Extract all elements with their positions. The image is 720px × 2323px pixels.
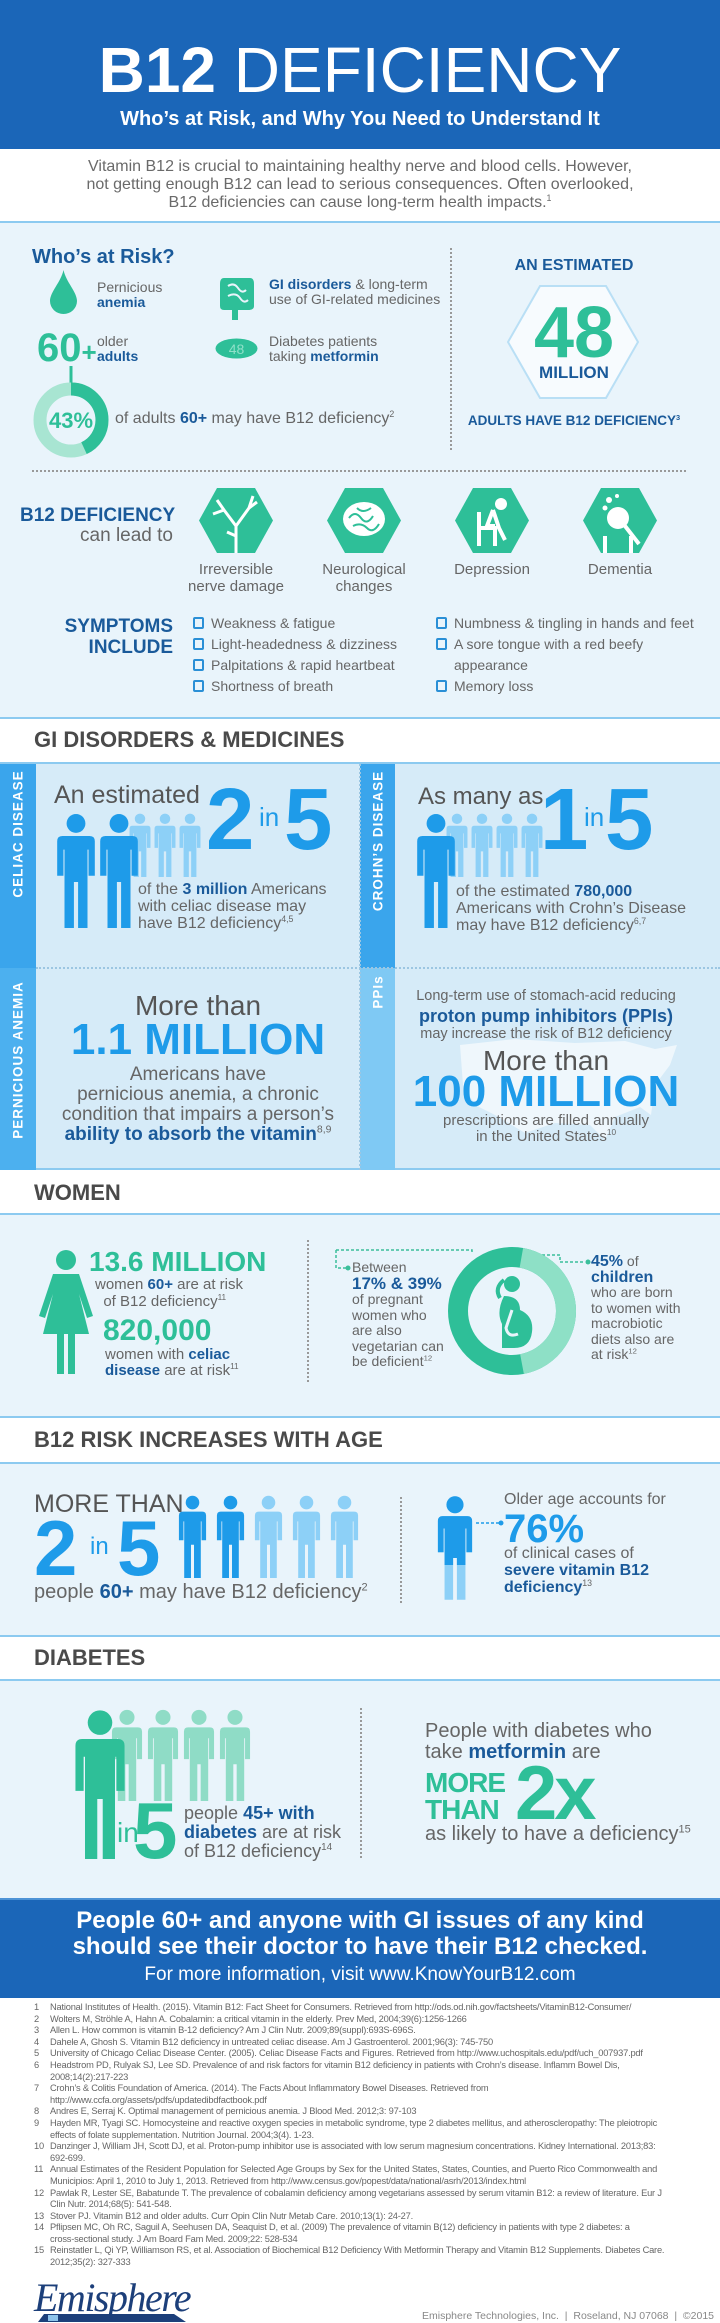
text: 76% stat: severe vitamin B12 — [504, 1562, 649, 1579]
text: older adults: older — [97, 333, 128, 349]
text: metformin stat — [425, 1720, 691, 1845]
panel: GI disorders grid — [0, 762, 720, 1170]
references: 11 — [34, 2164, 43, 2174]
text: older adults — [97, 333, 138, 364]
text: 76% stat: deficiency13 — [504, 1578, 592, 1596]
stat: 2 in 5 people 60+: 2 — [34, 1504, 77, 1592]
list: symptoms column 2 — [436, 615, 694, 694]
text: pregnant women stat: be deficient12 — [352, 1353, 432, 1369]
references: 7 — [34, 2083, 39, 2093]
panel: crohn's: 5 — [605, 771, 653, 868]
text: symptoms include — [65, 616, 173, 658]
chart: 43% ring: 43% — [49, 408, 93, 433]
label: celiac disease: CELIAC DISEASE — [10, 770, 26, 898]
text: children stat: who are born — [591, 1284, 673, 1300]
references: Allen L. How common is vitamin B-12 deficiency? Am J Clin Nutr. 2009;89(suppl):693S-696S. — [50, 2025, 416, 2035]
text: pregnant women stat: women who — [352, 1306, 427, 1322]
stat: 60+: 60+ — [37, 326, 97, 370]
references: 8 — [34, 2106, 39, 2116]
references: 2012;35(2): 327-333 — [50, 2257, 130, 2267]
chart: 43% ring — [34, 366, 108, 458]
icon: neurological: Neurological — [322, 561, 406, 578]
list: symptoms column 1: Palpitations & rapid heartbeat — [211, 657, 395, 673]
heading: women: WOMEN — [34, 1180, 121, 1205]
label: pernicious anemia: PERNICIOUS ANEMIA — [10, 981, 26, 1139]
stat: 2 in 5 people 60+: 5 — [117, 1504, 160, 1592]
text: diabetes patients: taking metformin — [269, 348, 379, 364]
references: 14 — [34, 2222, 44, 2232]
stat: 13.6 million women — [89, 1246, 266, 1379]
stat: 1 in 5 diabetes: people 45+ with — [184, 1803, 315, 1823]
references: 6 — [34, 2060, 39, 2070]
panel: who's at risk — [0, 221, 720, 719]
stat: 2 in 5 people 60+ — [34, 1490, 368, 1603]
references: Reinstatler L, Qi YP, Williamson RS, et al. Association of Biochemical B12 Deficiency With Metformin Therapy and Vitamin B12 Supplements. Diabetes Care. — [50, 2245, 664, 2255]
text: 76% stat: Older age accounts for — [504, 1491, 666, 1508]
panel: PPIs: in the United States10 — [476, 1128, 616, 1145]
text: children stat — [591, 1253, 680, 1362]
callout: footer banner: should see their doctor to have their B12 checked. — [73, 1933, 647, 1960]
text: diabetes patients: Diabetes patients — [269, 333, 377, 349]
panel: PPIs — [413, 988, 679, 1145]
icon: depression: Depression — [454, 561, 530, 578]
icon: depression — [454, 488, 530, 578]
stat: 13.6 million women: 820,000 — [103, 1314, 211, 1347]
references: Headstrom PD, Rulyak SJ, Lee SD. Prevalence of and risk factors for vitamin B12 deficiency in patients with Crohn’s disease. Inflamm Bowel Dis, — [50, 2060, 620, 2070]
text: children stat: macrobiotic — [591, 1315, 663, 1331]
panel: diabetes — [0, 1679, 720, 1899]
references: 1 — [34, 2002, 39, 2012]
heading: who's at risk: Who’s at Risk? — [32, 246, 175, 268]
references: Pflipsen MC, Oh RC, Saguil A, Seehusen DA, Seaquist D, et al. (2009) The prevalence of vitamin B(12) deficiency in patients with type 2 diabetes: a — [50, 2222, 630, 2232]
panel: celiac: 2 — [206, 771, 254, 868]
callout: 48 million: 48 — [534, 293, 614, 373]
icon: intestine — [220, 278, 254, 320]
list: symptoms column 2: Memory loss — [454, 678, 533, 694]
stat: 13.6 million women: women with celiac — [105, 1346, 230, 1363]
text: B12 deficiency can lead to: B12 DEFICIENCY — [20, 505, 175, 526]
callout: 48 million: AN ESTIMATED — [515, 257, 633, 274]
icon: five people — [178, 1496, 358, 1578]
text: metformin stat: 2x — [515, 1751, 594, 1836]
references: National Institutes of Health. (2015). Vitamin B12: Fact Sheet for Consumers. Retrieved from http://ods.od.nih.gov/factsheets/VitaminB12-Consumer/ — [50, 2002, 631, 2012]
text: metformin stat: as likely to have a deficiency15 — [425, 1823, 691, 1845]
intro text: B12 deficiencies can cause long-term health impacts.1 — [169, 193, 551, 211]
text: children stat: diets also are — [591, 1330, 674, 1346]
panel: crohn's: in — [584, 802, 604, 832]
subtitle: Who’s at Risk, and Why You Need to Understand It — [120, 108, 600, 130]
callout: 48 million: ADULTS HAVE B12 DEFICIENCY3 — [468, 413, 680, 428]
panel: celiac: of the 3 million Americans — [138, 881, 327, 898]
heading: GI disorders: GI DISORDERS & MEDICINES — [34, 727, 344, 752]
text: 76% stat — [504, 1491, 666, 1596]
stat: 1 in 5 diabetes: of B12 deficiency14 — [184, 1841, 332, 1861]
panel: pernicious anemia: More than — [135, 990, 261, 1021]
references: effects of folate supplementation. Nutrition Journal. 2004;3(4). 1-23. — [50, 2130, 314, 2140]
icon: US map — [460, 1039, 677, 1140]
icon: drop — [50, 270, 77, 314]
list: symptoms column 2: appearance — [454, 657, 528, 673]
list: symptoms column 1 — [193, 615, 397, 694]
panel: PPIs: Long-term use of stomach-acid reducing — [416, 988, 676, 1004]
references: Crohn’s & Colitis Foundation of America. (2014). The Facts About Inflammatory Bowel Diseases. Retrieved from — [50, 2083, 488, 2093]
list: symptoms column 2: Numbness & tingling in hands and feet — [454, 615, 694, 631]
stat: 1 in 5 diabetes: in — [117, 1817, 139, 1848]
references: Stover PJ. Vitamin B12 and older adults. Curr Opin Clin Nutr Metab Care. 2010;13(1): 24-27. — [50, 2211, 413, 2221]
icon: pill: 48 — [229, 341, 244, 357]
text: pernicious anemia: Pernicious — [97, 279, 162, 295]
text: metformin stat: take metformin are — [425, 1741, 601, 1763]
references: University of Chicago Celiac Disease Center. (2005). Celiac Disease Facts and Figures. Retrieved from http://www.uchospitals.edu/pdf/uch_007937.pdf — [50, 2048, 643, 2058]
references: Clin Nutr. 2014;68(5): 541-548. — [50, 2199, 171, 2209]
text: pregnant women stat: Between — [352, 1259, 406, 1275]
text: symptoms include: SYMPTOMS — [65, 616, 173, 637]
references: 5 — [34, 2048, 39, 2058]
intro text: not getting enough B12 can lead to serious consequences. Often overlooked, — [86, 176, 634, 193]
panel: crohn's: As many as — [418, 783, 543, 810]
stat: 2 in 5 people 60+: in — [90, 1533, 109, 1560]
references: Andres E, Serraj K. Optimal management of pernicious anemia. J Blood Med. 2012;3: 97-103 — [50, 2106, 416, 2116]
panel: crohn's: Americans with Crohn’s Disease — [456, 900, 686, 917]
panel: pernicious anemia: condition that impairs a person’s — [62, 1104, 334, 1125]
panel: PPIs: prescriptions are filled annually — [443, 1112, 649, 1129]
stat: 13.6 million women: of B12 deficiency11 — [103, 1293, 226, 1310]
icon: pill — [216, 338, 258, 358]
text: 76% stat: 76% — [504, 1507, 584, 1551]
callout: 48 million — [468, 257, 680, 428]
text: diabetes patients — [269, 333, 379, 364]
panel: pernicious anemia: pernicious anemia, a chronic — [77, 1084, 319, 1105]
text: symptoms include: INCLUDE — [89, 637, 173, 658]
panel: crohn's: may have B12 deficiency6,7 — [456, 916, 646, 934]
text: B12 deficiency can lead to: can lead to — [80, 525, 173, 546]
footer credit: Emisphere Technologies, Inc. | Roseland, NJ 07068 | ©2015 — [422, 2310, 714, 2322]
text: children stat: at risk12 — [591, 1346, 637, 1362]
panel: crohn's: of the estimated 780,000 — [456, 883, 632, 900]
references: Pawlak R, Lester SE, Babatunde T. The prevalence of cobalamin deficiency among vegetarians assessed by serum vitamin B12: a review of literature. Eur J — [50, 2188, 662, 2198]
text: GI disorders: use of GI-related medicines — [269, 291, 440, 307]
panel: PPIs: may increase the risk of B12 deficiency — [420, 1026, 672, 1042]
references: 4 — [34, 2037, 39, 2047]
text: children stat: children — [591, 1268, 653, 1286]
heading: B12 risk increases with age: B12 RISK INCREASES WITH AGE — [34, 1427, 383, 1452]
panel: age — [0, 1462, 720, 1637]
references: Danzinger J, William JH, Scott DJ, et al. Proton-pump inhibitor use is associated with low serum magnesium concentrations. Kidney International. 2013;83: — [50, 2141, 656, 2151]
stat: 13.6 million women: disease are at risk11 — [105, 1362, 239, 1379]
chart: pregnant woman ring — [335, 1247, 590, 1375]
panel: celiac — [54, 771, 332, 932]
logo: Emisphere: Emisphere — [34, 2275, 190, 2320]
stat: 13.6 million women: 13.6 MILLION — [89, 1246, 266, 1277]
label: PPIs: PPIs — [370, 975, 386, 1009]
references: 10 — [34, 2141, 44, 2151]
references: http://www.ccfa.org/assets/pdfs/updatedibdfactbook.pdf — [50, 2095, 267, 2105]
intro text — [86, 158, 634, 211]
icon: nerve damage: nerve damage — [188, 578, 284, 595]
text: pernicious anemia — [97, 279, 162, 310]
references: Dahele A, Ghosh S. Vitamin B12 deficiency in untreated celiac disease. Am J Gastroenterol. 2001;96(3): 745-750 — [50, 2037, 493, 2047]
list: symptoms column 2: A sore tongue with a red beefy — [454, 636, 643, 652]
text: older adults: adults — [97, 348, 138, 364]
text: metformin stat: THAN — [425, 1794, 499, 1825]
label: crohn's disease: CROHN’S DISEASE — [370, 771, 386, 911]
text: pregnant women stat: 17% & 39% — [352, 1274, 442, 1292]
references: 9 — [34, 2118, 39, 2128]
panel: celiac: have B12 deficiency4,5 — [138, 914, 293, 932]
callout: 48 million: MILLION — [539, 363, 609, 382]
panel: celiac: 5 — [284, 771, 332, 868]
list: symptoms column 1: Weakness & fatigue — [211, 615, 335, 631]
panel: pernicious anemia: ability to absorb the vitamin8,9 — [65, 1124, 331, 1145]
panel: crohn's: 1 — [540, 771, 588, 868]
heading: diabetes: DIABETES — [34, 1645, 145, 1670]
references: 12 — [34, 2188, 44, 2198]
panel: pernicious anemia: Americans have — [130, 1064, 266, 1085]
list: symptoms column 1: Light-headedness & dizziness — [211, 636, 397, 652]
panel: celiac: in — [259, 802, 279, 832]
icon: nerve damage: Irreversible — [199, 561, 273, 578]
text: pregnant women stat: are also — [352, 1322, 402, 1338]
icon: dementia — [583, 488, 657, 578]
references: 3 — [34, 2025, 39, 2035]
references — [34, 2002, 664, 2267]
stat: 1 in 5 diabetes — [117, 1786, 341, 1875]
stat: 1 in 5 diabetes: diabetes are at risk — [184, 1822, 341, 1842]
text: 43% caption: of adults 60+ may have B12 deficiency2 — [115, 409, 394, 427]
panel: crohn's — [417, 771, 686, 934]
references: 13 — [34, 2211, 44, 2221]
callout: footer banner: For more information, visit www.KnowYourB12.com — [144, 1964, 576, 1985]
panel: PPIs: 100 MILLION — [413, 1067, 679, 1116]
panel: PPIs: More than — [483, 1045, 609, 1076]
references: Hayden MR, Tyagi SC. Homocysteine and reactive oxygen species in metabolic syndrome, type 2 diabetes mellitus, and atheroscleropathy: The pleiotropic — [50, 2118, 657, 2128]
panel: celiac: An estimated — [54, 781, 200, 809]
header banner — [0, 0, 720, 149]
icon: older person — [438, 1496, 504, 1600]
text: metformin stat: People with diabetes who — [425, 1720, 652, 1742]
panel: pernicious anemia — [62, 990, 334, 1145]
panel: celiac: with celiac disease may — [138, 898, 306, 915]
references: Wolters M, Ströhle A, Hahn A. Cobalamin: a critical vitamin in the elderly. Prev Med, 2004;39(6):1256-1266 — [50, 2014, 467, 2024]
text: GI disorders — [269, 276, 440, 307]
references: 15 — [34, 2245, 44, 2255]
text: children stat: 45% of — [591, 1253, 639, 1270]
stat: 2 in 5 people 60+: people 60+ may have B12 deficiency2 — [34, 1581, 368, 1603]
icon: diabetes people — [75, 1710, 250, 1859]
list: symptoms column 1: Shortness of breath — [211, 678, 333, 694]
text: 76% stat: of clinical cases of — [504, 1545, 634, 1562]
text: children stat: to women with — [591, 1300, 680, 1316]
text: metformin stat: MORE — [425, 1767, 505, 1798]
references: Municipios: April 1, 2010 to July 1, 2013. Retrieved from http://www.census.gov/popest/data/national/asrh/2013/index.html — [50, 2176, 526, 2186]
icon: neurological — [322, 488, 406, 595]
references: 692-699. — [50, 2153, 85, 2163]
stat: 13.6 million women: women 60+ are at risk — [95, 1276, 243, 1293]
title: B12 DEFICIENCY — [99, 34, 621, 106]
callout: footer banner — [0, 1898, 720, 1998]
text: B12 deficiency can lead to — [20, 505, 175, 546]
callout: footer banner: People 60+ and anyone with GI issues of any kind — [76, 1907, 644, 1934]
icon: nerve damage — [188, 488, 284, 595]
text: pregnant women stat: vegetarian can — [352, 1338, 444, 1354]
text: pernicious anemia: anemia — [97, 294, 145, 310]
intro text: Vitamin B12 is crucial to maintaining healthy nerve and blood cells. However, — [88, 158, 632, 175]
icon: woman — [39, 1250, 93, 1374]
panel: PPIs: proton pump inhibitors (PPIs) — [419, 1006, 673, 1026]
text: pregnant women stat: of pregnant — [352, 1291, 423, 1307]
text: pregnant women stat — [352, 1259, 444, 1369]
icon: dementia: Dementia — [588, 561, 652, 578]
stat: 1 in 5 diabetes: 5 — [133, 1786, 178, 1875]
stat: 2 in 5 people 60+: MORE THAN — [34, 1490, 184, 1518]
references: cross-sectional study. J Am Board Fam Med. 2009;22: 528-534 — [50, 2234, 297, 2244]
text: GI disorders: GI disorders & long-term — [269, 276, 428, 292]
panel: women — [0, 1213, 720, 1418]
panel: pernicious anemia: 1.1 MILLION — [71, 1015, 325, 1064]
references: Annual Estimates of the Resident Population for Selected Age Groups by Sex for the United States, States, Counties, and Puerto Rico Commonwealth and — [50, 2164, 657, 2174]
references: 2 — [34, 2014, 39, 2024]
icon: neurological: changes — [336, 578, 392, 595]
references: 2008;14(2):217-223 — [50, 2072, 128, 2082]
